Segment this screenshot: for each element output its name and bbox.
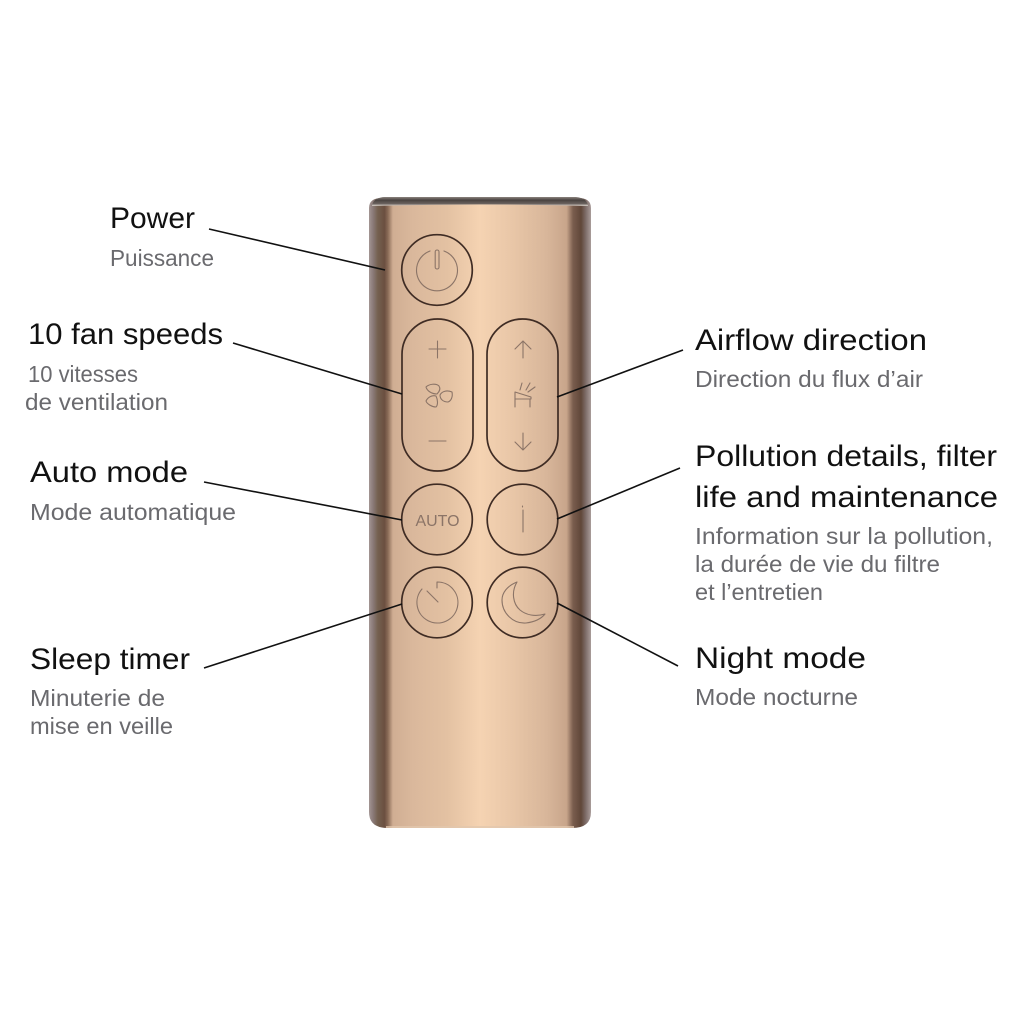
bottom edge highlight (386, 826, 574, 828)
callout: fan speeds: 10 vitesses (28, 361, 138, 387)
callout: night mode (557, 603, 866, 710)
callout: airflow direction: Airflow direction (695, 324, 927, 357)
remote control body (369, 197, 591, 828)
icon: fan (426, 384, 452, 407)
airflow direction button (487, 319, 558, 471)
fan speed button (402, 319, 473, 471)
callout: night mode: Mode nocturne (695, 684, 858, 710)
callout: sleep timer: Sleep timer (30, 643, 190, 676)
callout: pollution details: la durée de vie du filtre (695, 551, 940, 577)
callout: sleep timer: Minuterie de (30, 685, 165, 711)
callout: pollution details: Pollution details, filter (695, 440, 997, 473)
callout: sleep timer: mise en veille (30, 713, 173, 739)
callout: sleep timer (30, 604, 402, 739)
icon: power (417, 250, 458, 291)
icon: timer (417, 582, 458, 623)
callout: pollution details: life and maintenance (695, 481, 998, 514)
callout: fan speeds: 10 fan speeds (28, 318, 223, 351)
icon: airflow oscillation (515, 383, 535, 407)
callout: night mode: Night mode (695, 642, 866, 675)
callout: fan speeds: de ventilation (25, 389, 168, 415)
callout: power (110, 202, 385, 271)
icon: plus (429, 341, 446, 358)
callout: auto mode: Auto mode (30, 456, 188, 489)
top opening rim (372, 197, 588, 206)
power button (402, 235, 472, 305)
callout: airflow direction: Direction du flux d’air (695, 366, 923, 392)
night mode button (487, 567, 558, 638)
callout: power: Puissance (110, 245, 214, 271)
icon: arrow up (515, 341, 531, 358)
callout: auto mode (30, 456, 402, 525)
icon: auto label: AUTO (416, 513, 460, 530)
sleep timer button (402, 567, 472, 638)
information button (487, 484, 558, 555)
callout: pollution details: et l’entretien (695, 579, 823, 605)
icon: minus (429, 440, 446, 442)
callout: fan speeds (25, 318, 402, 415)
callout: auto mode: Mode automatique (30, 499, 236, 525)
callout: pollution details: Information sur la pollution, (695, 523, 993, 549)
icon: moon (502, 582, 545, 623)
callout: power: Power (110, 202, 195, 235)
icon: information (522, 506, 524, 532)
callout: pollution details (557, 440, 998, 605)
icon: arrow down (515, 433, 531, 450)
callout: airflow direction (557, 324, 927, 397)
auto button (402, 484, 472, 555)
